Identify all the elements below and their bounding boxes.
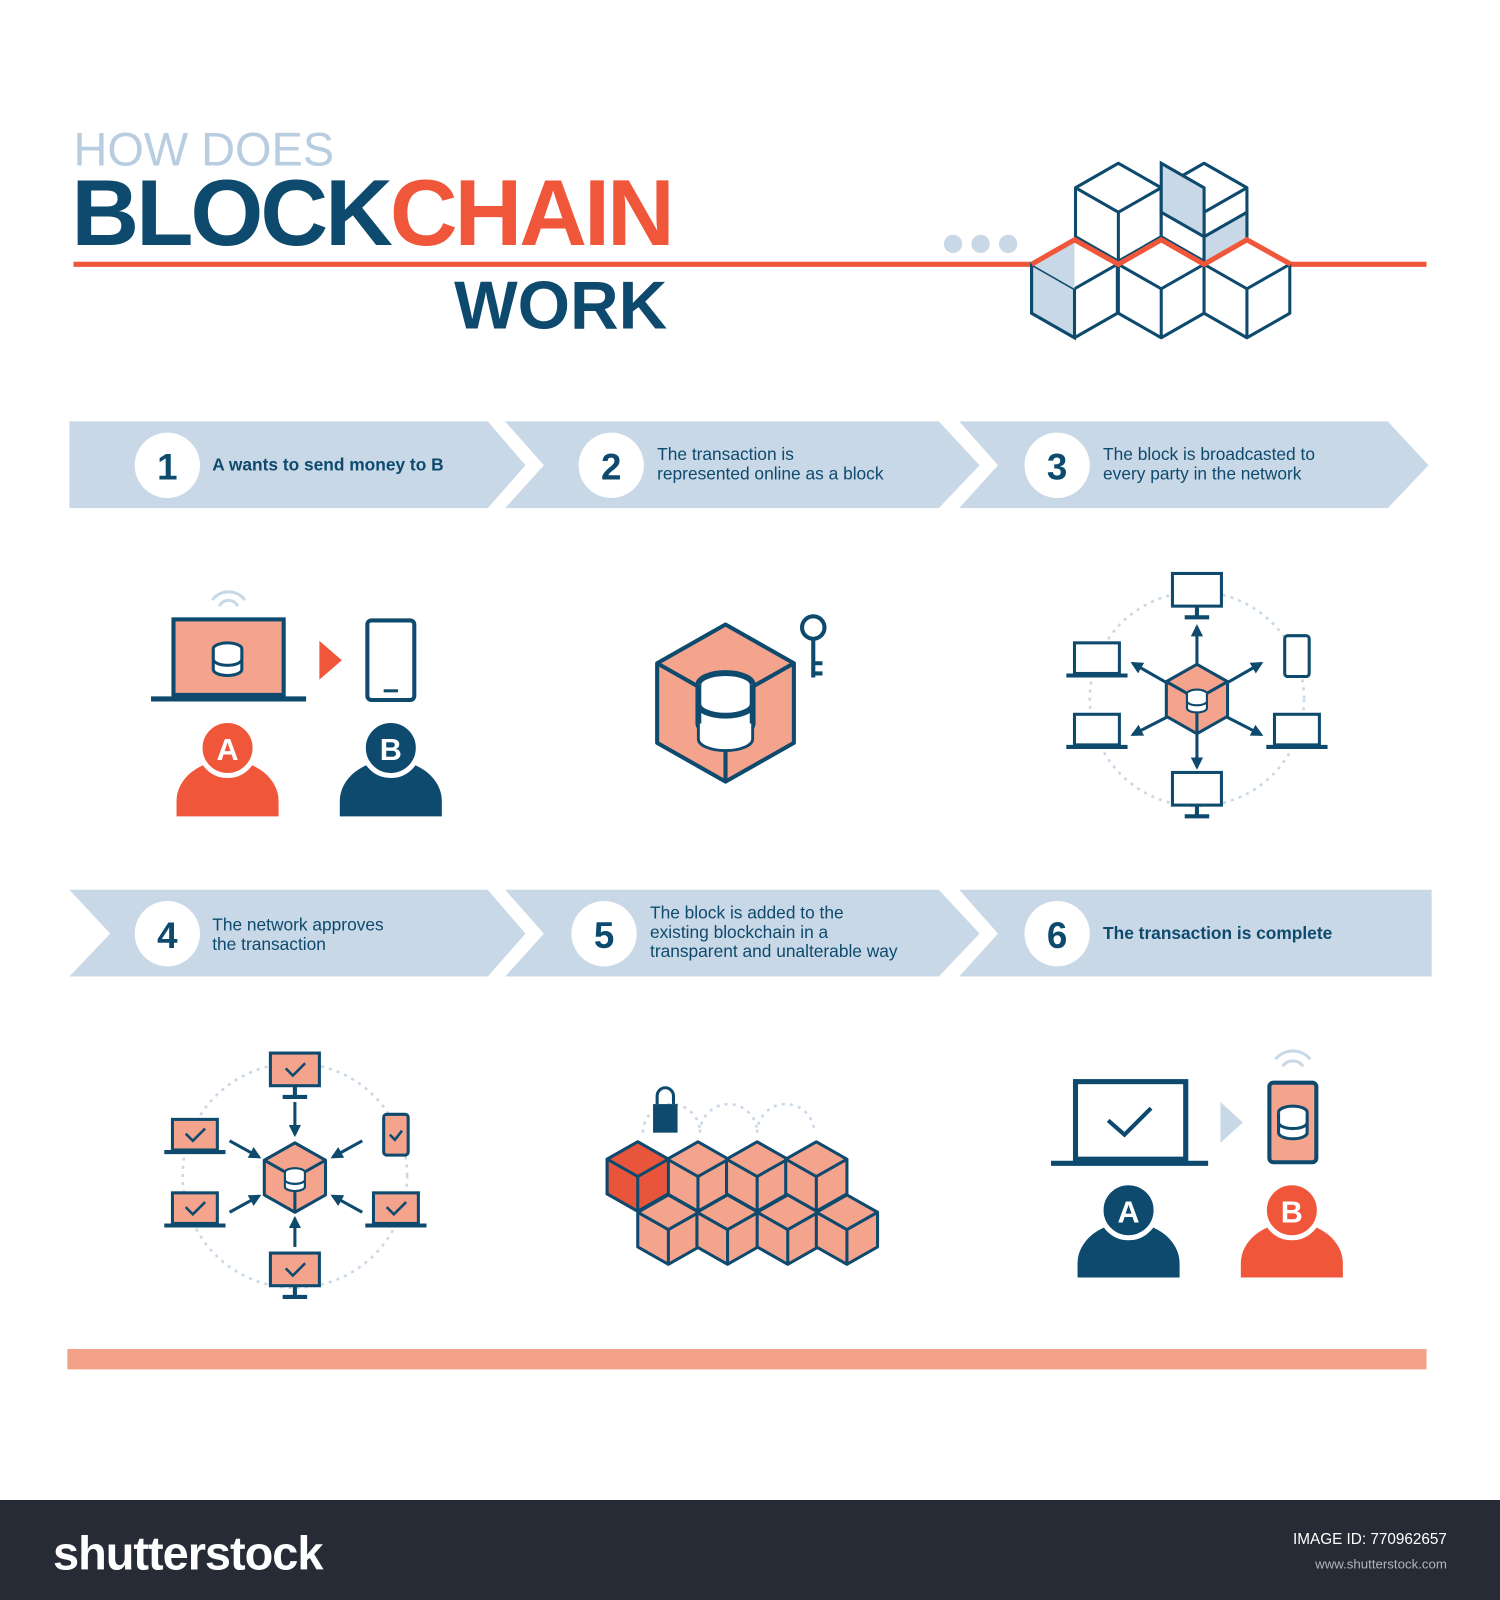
icon: step6 complete: B [1281,1195,1303,1229]
title: BLOCKCHAIN [71,160,672,265]
title: HOW DOES [73,123,334,175]
dots [944,235,1017,253]
step row 1: The transaction is [657,444,794,464]
step row 1: represented online as a block [657,464,884,484]
icon: step1 send money: B [380,733,402,767]
header line [73,262,1427,267]
icon: step1 send money [151,592,442,816]
step row 1: The block is broadcasted to [1103,444,1315,464]
icon: step6 complete [1051,1051,1343,1278]
icon: step6 complete: A [1118,1195,1140,1229]
step row 2 [69,890,1432,977]
step row 2: 4 [157,915,178,956]
step row 2: transparent and unalterable way [650,941,898,961]
step row 1: 1 [157,447,178,488]
step row 2: 5 [594,915,614,956]
footer [0,1500,1500,1600]
step row 1: 2 [601,447,621,488]
icon: step2 block [657,616,824,782]
step row 1: 3 [1047,447,1067,488]
icon: step5 blockchain [607,1088,878,1264]
icon: step3 broadcast network [1066,573,1328,816]
header cubes [1032,163,1291,338]
title [71,123,672,344]
step row 1: every party in the network [1103,464,1302,484]
step row 2: the transaction [212,934,326,954]
footer: shutterstock [53,1527,324,1579]
title: WORK [454,269,667,344]
bottom bar [67,1349,1427,1369]
step row 2: The block is added to the [650,902,844,922]
footer: www.shutterstock.com [1314,1556,1447,1571]
step row 1 [69,421,1429,508]
step row 2: 6 [1047,915,1067,956]
icon: step1 send money: A [216,733,239,767]
icon: step4 network approves [164,1053,427,1297]
step row 1: A wants to send money to B [212,454,444,474]
step row 2: existing blockchain in a [650,922,829,942]
step row 2: The network approves [212,915,384,935]
step row 2: The transaction is complete [1103,923,1333,943]
footer: IMAGE ID: 770962657 [1293,1531,1447,1548]
